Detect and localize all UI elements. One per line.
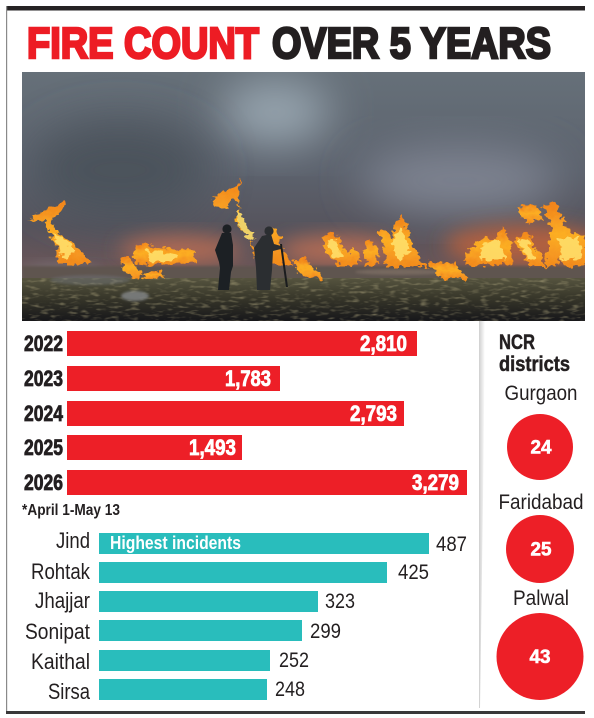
NCR heading: NCR — [499, 331, 535, 354]
bar 2024: 2,793 — [350, 401, 397, 426]
bar 2026: 3,279 — [412, 470, 459, 495]
Palwal circle: Palwal — [513, 587, 569, 610]
bar chart: districts — [25, 528, 467, 704]
bar Kaithal: 252 — [279, 649, 309, 672]
bar Rohtak: Rohtak — [31, 559, 91, 584]
photo: farmers in front of burning field — [15, 72, 594, 321]
bar 2023 — [24, 366, 280, 391]
bar 2025: 1,493 — [189, 435, 236, 460]
bar Kaithal — [31, 649, 309, 674]
bar Sirsa: Sirsa — [48, 679, 91, 704]
Gurgaon circle: Gurgaon — [504, 382, 578, 405]
bar 2024: 2024 — [24, 401, 64, 426]
bar 2025 — [24, 435, 242, 460]
bar 2022 — [24, 331, 417, 356]
bar Jind: 487 — [436, 533, 467, 556]
bar 2026 — [24, 470, 467, 495]
Palwal circle: 43 — [530, 647, 550, 668]
bar 2022: 2,810 — [360, 331, 407, 356]
bar Rohtak — [31, 559, 429, 584]
bar 2022: 2022 — [24, 331, 63, 356]
farmer right with stick — [254, 226, 288, 290]
Faridabad circle: Faridabad — [498, 491, 584, 514]
bar 2025: 2025 — [24, 435, 63, 460]
field — [22, 266, 585, 321]
bar Sonipat — [25, 619, 341, 644]
title: FIRE COUNT — [27, 19, 259, 68]
bar Jind: Highest incidents — [110, 533, 241, 553]
Faridabad circle: 25 — [530, 540, 552, 560]
bar Jind — [56, 528, 467, 556]
flames — [29, 177, 586, 279]
bar Jhajjar — [35, 588, 355, 613]
bar 2026: 2026 — [24, 470, 63, 495]
bar chart: fire count by year — [24, 331, 467, 495]
bar 2024 — [24, 401, 404, 426]
farmer left — [215, 224, 233, 290]
bar Jhajjar: 323 — [325, 590, 355, 613]
Gurgaon circle — [504, 382, 578, 480]
NCR heading: districts — [499, 353, 570, 376]
bar 2023: 2023 — [24, 366, 63, 391]
NCR heading — [499, 331, 570, 376]
bar Sonipat: Sonipat — [25, 619, 90, 644]
bar Rohtak: 425 — [398, 561, 429, 584]
title: OVER 5 YEARS — [272, 19, 551, 68]
bar Jind: Jind — [56, 528, 90, 553]
Faridabad circle — [498, 491, 584, 583]
bar Sirsa: 248 — [275, 678, 305, 701]
footnote: *April 1-May 13 — [22, 502, 120, 519]
bar Sirsa — [48, 678, 305, 704]
bar 2023: 1,783 — [225, 366, 271, 391]
panel: NCR districts — [496, 331, 584, 700]
Gurgaon circle: 24 — [530, 438, 552, 458]
smoke clouds — [15, 80, 594, 299]
Palwal circle — [496, 587, 584, 700]
panel divider shadow — [479, 321, 485, 708]
flame highlights — [52, 210, 584, 262]
title — [27, 19, 551, 68]
bar Jhajjar: Jhajjar — [35, 588, 90, 613]
bar Kaithal: Kaithal — [31, 649, 90, 674]
bar Sonipat: 299 — [310, 620, 341, 643]
